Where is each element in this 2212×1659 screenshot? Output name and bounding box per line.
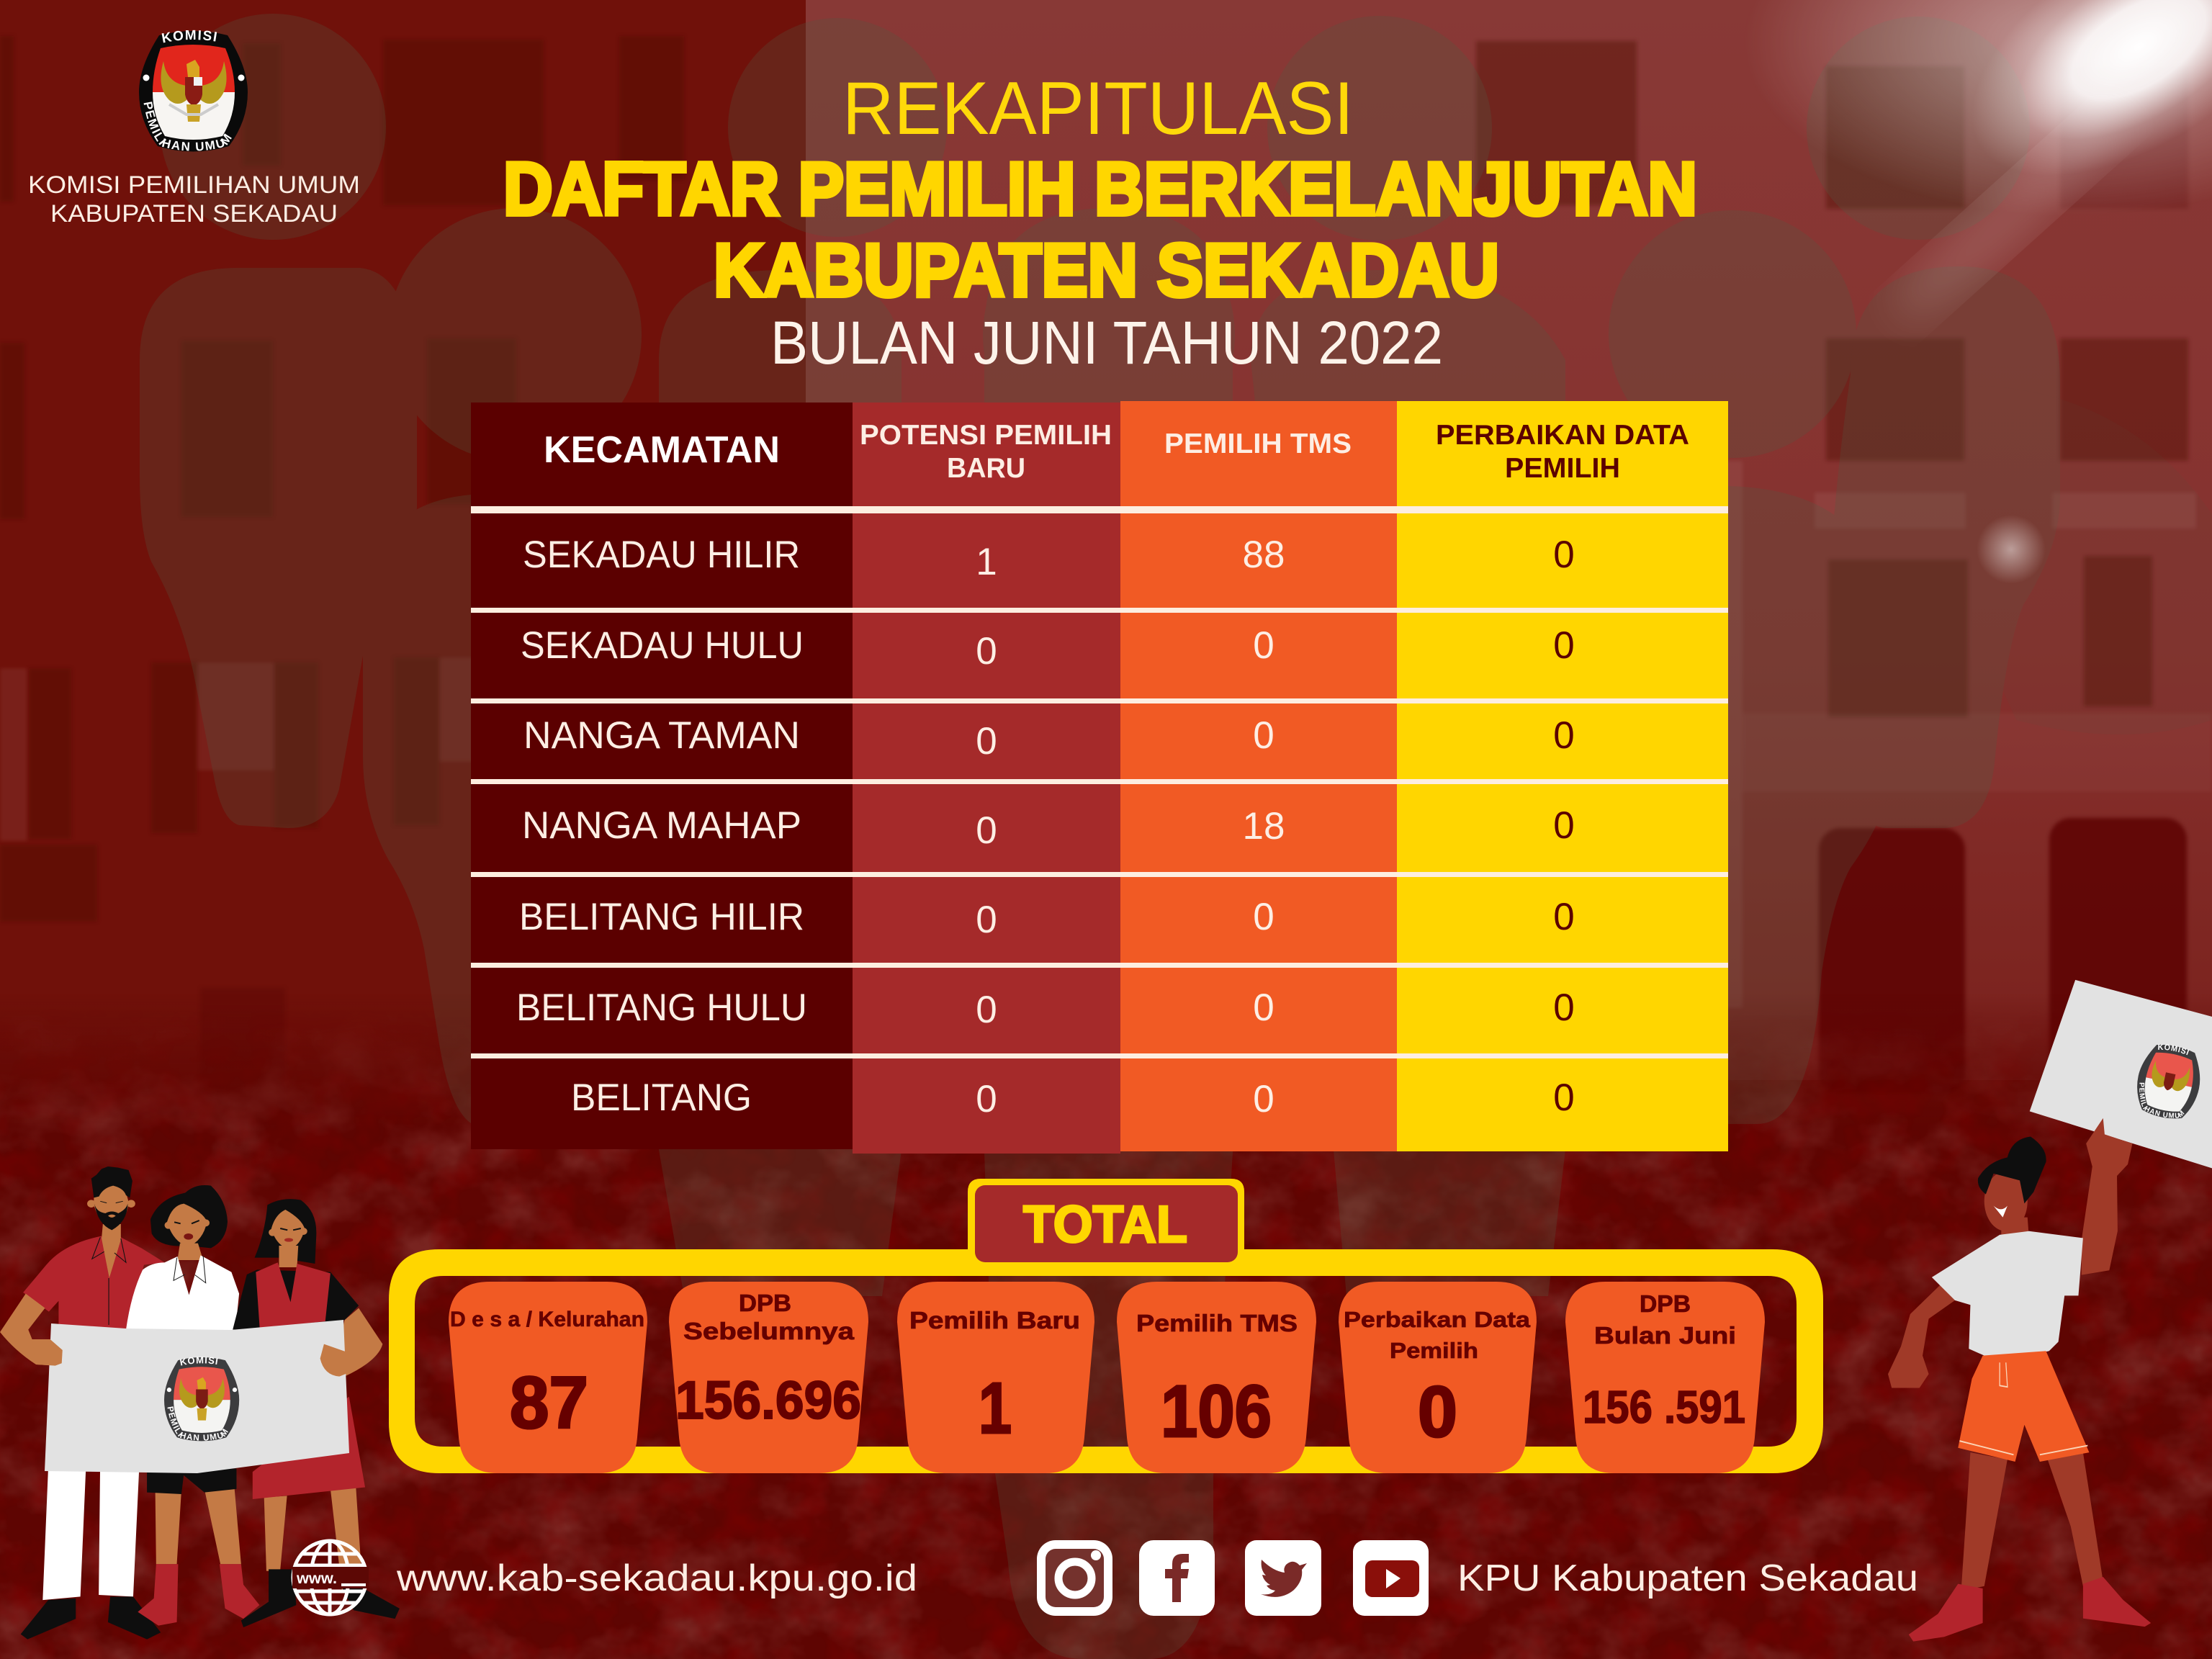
row: Nanga Taman: NANGA TAMAN [523, 714, 800, 757]
logo: KPU emblem on sign: KOMISI [2158, 1044, 2189, 1056]
icon: website globe [292, 1541, 369, 1614]
row: Sekadau Hilir: 88 [1243, 534, 1285, 576]
row: Nanga Mahap: 0 [976, 809, 997, 852]
card: Desa/Kelurahan: 87 [510, 1362, 588, 1444]
logo: KPU emblem on sign: PEMILIHAN UMUM [2139, 1083, 2185, 1118]
row: Belitang: 0 [1553, 1076, 1575, 1119]
row: Nanga Mahap [522, 804, 1575, 852]
card: Pemilih Baru: Pemilih Baru [909, 1307, 1080, 1334]
logo: KPU emblem on banner: PEMILIHAN UMUM [167, 1406, 228, 1441]
row: Belitang Hilir: 0 [1253, 896, 1274, 938]
row: Belitang Hulu [516, 986, 1575, 1031]
logo: KPU emblem on banner: KOMISI [180, 1357, 217, 1365]
card: DPB Bulan Juni [1565, 1282, 1765, 1473]
table header row: KECAMATAN [544, 429, 780, 471]
card: Desa/Kelurahan: D e s a / Kelurahan [450, 1308, 644, 1331]
row: Sekadau Hulu: 0 [976, 630, 997, 673]
row: Nanga Mahap: 18 [1243, 805, 1285, 848]
row: Belitang: 0 [976, 1078, 997, 1120]
row: Sekadau Hulu: 0 [1253, 624, 1274, 667]
illustration: three people holding KPU banner [0, 1166, 400, 1640]
table header row [544, 420, 1689, 484]
row: Belitang: 0 [1253, 1078, 1274, 1120]
illustration: woman holding KPU sign [1888, 979, 2212, 1642]
row: Nanga Taman: 0 [1553, 714, 1575, 757]
row: Belitang Hilir: BELITANG HILIR [519, 896, 804, 938]
card: Pemilih Baru: 1 [979, 1368, 1012, 1449]
card: DPB Sebelumnya: Sebelumnya [683, 1318, 855, 1344]
website address: www.kab-sekadau.kpu.go.id [396, 1557, 917, 1599]
upper bodies [0, 1166, 382, 1377]
banner [45, 1320, 349, 1473]
icon: twitter [1245, 1540, 1321, 1616]
icon: youtube [1353, 1540, 1429, 1616]
card: Perbaikan Data Pemilih: 0 [1418, 1372, 1457, 1452]
row: Nanga Taman: 0 [1253, 714, 1274, 757]
row: Belitang [571, 1076, 1575, 1120]
row: Sekadau Hilir: SEKADAU HILIR [523, 534, 800, 576]
card: Pemilih TMS: Pemilih TMS [1136, 1310, 1298, 1336]
row: Sekadau Hilir [523, 534, 1575, 583]
table header row: BARU [947, 453, 1025, 484]
row: Nanga Taman: 0 [976, 720, 997, 763]
heading tab: TOTAL: TOTAL [1023, 1196, 1187, 1254]
row: Belitang Hulu: 0 [1553, 986, 1575, 1029]
row: Belitang Hulu: 0 [976, 989, 997, 1031]
social account name: KPU Kabupaten Sekadau [1457, 1557, 1918, 1599]
panel: totals frame [389, 1249, 1823, 1473]
organisation name: KOMISI PEMILIHAN UMUM [28, 171, 360, 199]
logo: KPU emblem top left: PEMILIHAN UMUM [144, 102, 232, 151]
card: Pemilih Baru [897, 1282, 1094, 1473]
man [0, 1166, 165, 1366]
icon: facebook [1139, 1540, 1215, 1616]
row: Belitang Hilir: 0 [976, 899, 997, 941]
title: KABUPATEN SEKADAU [714, 229, 1499, 313]
card: Pemilih TMS: 106 [1161, 1370, 1272, 1452]
card: Perbaikan Data Pemilih [1339, 1282, 1537, 1473]
row: Nanga Mahap: NANGA MAHAP [522, 804, 801, 847]
row: Belitang Hulu: BELITANG HULU [516, 986, 807, 1029]
card: Pemilih TMS [1117, 1282, 1316, 1473]
card: Perbaikan Data Pemilih: Pemilih [1390, 1338, 1478, 1363]
title [503, 67, 1697, 377]
logo: KPU emblem top left [139, 30, 248, 151]
row: Belitang Hilir: 0 [1553, 896, 1575, 938]
row: Sekadau Hilir: 0 [1553, 534, 1575, 576]
card: DPB Bulan Juni: 156 .591 [1583, 1381, 1745, 1433]
card: DPB Sebelumnya: 156.696 [675, 1370, 861, 1430]
table header row: PEMILIH TMS [1164, 428, 1352, 459]
table header row: PEMILIH [1505, 453, 1620, 484]
table header row: POTENSI PEMILIH [860, 420, 1112, 451]
row: Sekadau Hulu: SEKADAU HULU [521, 624, 804, 667]
panel: data table [471, 401, 1728, 1154]
card: Desa/Kelurahan [449, 1282, 647, 1473]
title: BULAN JUNI TAHUN 2022 [770, 309, 1443, 377]
title: DAFTAR PEMILIH BERKELANJUTAN [503, 148, 1697, 231]
row: Sekadau Hulu [521, 624, 1575, 673]
row: Nanga Mahap: 0 [1553, 804, 1575, 847]
heading tab: TOTAL [968, 1179, 1244, 1262]
table header row: PERBAIKAN DATA [1436, 420, 1689, 451]
row: Sekadau Hilir: 1 [976, 541, 997, 583]
organisation name [28, 171, 360, 228]
card: DPB Sebelumnya [669, 1282, 868, 1473]
organisation name: KABUPATEN SEKADAU [50, 200, 338, 228]
card: Perbaikan Data Pemilih: Perbaikan Data [1344, 1307, 1531, 1332]
lower bodies: legs, boots, skirt [21, 1397, 400, 1640]
woman in white shirt [126, 1185, 239, 1331]
logo: KPU emblem top left: KOMISI [161, 30, 217, 43]
hands holding banner [32, 1339, 360, 1377]
icon: website globe: www. [296, 1570, 337, 1587]
logo: KPU emblem on banner [164, 1357, 239, 1442]
row: Belitang Hilir [519, 896, 1575, 941]
icon: instagram [1037, 1540, 1112, 1616]
card: DPB Bulan Juni: DPB [1640, 1290, 1691, 1317]
logo: KPU emblem on sign [2137, 1044, 2200, 1119]
row: Nanga Taman [523, 714, 1575, 763]
woman in vest [233, 1199, 382, 1377]
card: DPB Bulan Juni: Bulan Juni [1594, 1322, 1736, 1349]
row: Belitang: BELITANG [571, 1076, 752, 1119]
title: REKAPITULASI [842, 67, 1354, 150]
card: DPB Sebelumnya: DPB [739, 1290, 791, 1316]
row: Sekadau Hulu: 0 [1553, 624, 1575, 667]
row: Belitang Hulu: 0 [1253, 986, 1274, 1029]
